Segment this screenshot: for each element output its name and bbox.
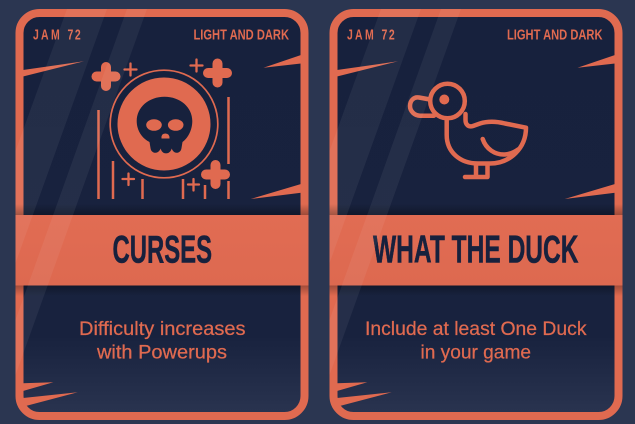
corner spikes (337, 55, 615, 406)
light streaks (16, 9, 147, 375)
label: theme: LIGHT AND DARK (507, 26, 603, 44)
description (79, 318, 246, 364)
corner spikes (23, 55, 301, 406)
description: Include at least One Duck (365, 318, 587, 340)
label: jam number: JAM72 (33, 26, 81, 43)
label: theme: LIGHT AND DARK (194, 26, 289, 44)
panel: card Curses (16, 9, 308, 416)
title band (330, 215, 622, 286)
card frame (20, 13, 304, 416)
title band (16, 215, 308, 286)
description: in your game (420, 342, 531, 364)
description: Difficulty increases (79, 318, 246, 340)
card frame (334, 13, 618, 416)
band shadows (16, 204, 308, 296)
band shadows (330, 204, 622, 296)
title: CURSES (112, 228, 212, 272)
icon: duck (410, 84, 526, 177)
panel: card What the Duck (330, 9, 622, 416)
icon: skull with sparkles (96, 60, 228, 199)
label: jam number: JAM72 (347, 26, 395, 43)
description (365, 318, 587, 364)
description: with Powerups (96, 342, 227, 364)
light streaks (330, 9, 461, 375)
